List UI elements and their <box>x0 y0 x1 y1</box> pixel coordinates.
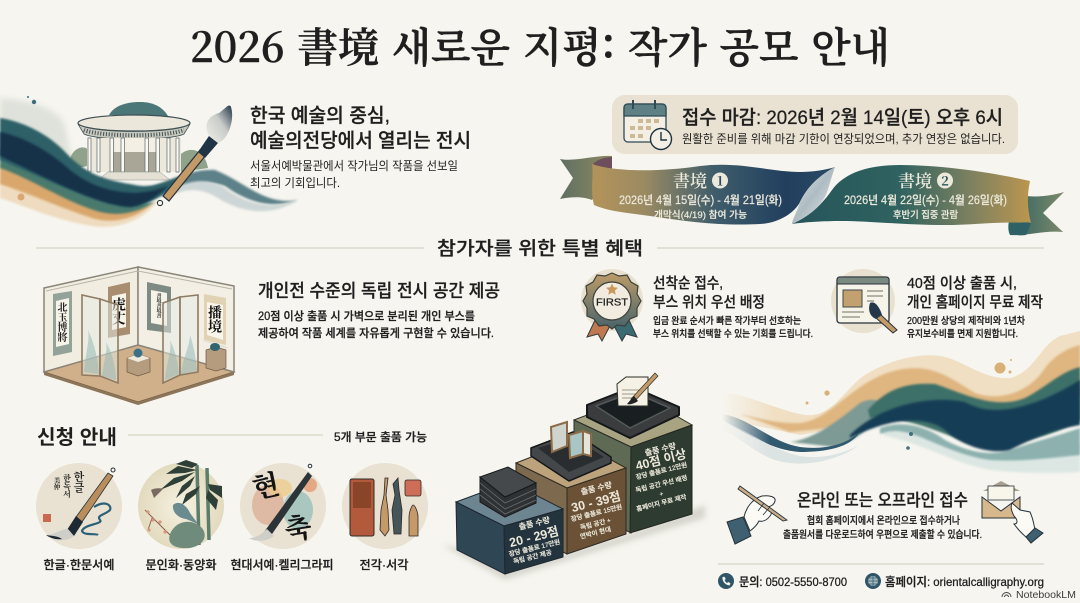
watermark icon <box>1002 592 1011 597</box>
deadline note: 원활한 준비를 위해 마감 기한이 연장되었으며, 추가 연장은 없습니다. <box>682 132 1005 146</box>
step label: 출품 수량 <box>518 514 551 532</box>
icon: hand with envelope <box>982 481 1043 543</box>
step label: 홈페이지 무료 제작 <box>635 492 687 513</box>
section note: 5개 부문 출품 가능 <box>334 430 427 444</box>
icon: modern calligraphy circle: 현 <box>248 463 283 507</box>
illustration: right ink wave <box>720 331 1080 473</box>
scroll 3: 書境書境書 <box>156 292 162 319</box>
wave: lower pale <box>880 430 1080 473</box>
folding screen right <box>163 295 198 383</box>
step label: 장당 출품료 17만원 <box>508 537 561 558</box>
icon: calligraphy circle <box>36 463 122 549</box>
icon: seal carving tools circle <box>342 463 428 549</box>
icon: first badge: FIRST <box>596 296 629 308</box>
section title: 신청 안내 <box>37 426 117 449</box>
benefit body line 1: 입금 완료 순서가 빠른 작가부터 선호하는 <box>653 314 801 327</box>
illustration: gallery booth <box>44 267 234 405</box>
step label: 장당 출품료 15만원 <box>570 502 623 523</box>
category: hangul and hanmun calligraphy <box>36 463 122 572</box>
step label: 독립 공간 + <box>579 515 612 532</box>
ceiling rail <box>46 271 232 291</box>
ink wave: pale tail <box>170 181 298 211</box>
ribbon number: 1 <box>717 170 723 190</box>
icon: first badge <box>581 269 643 341</box>
building: concert hall <box>70 102 208 180</box>
folding screen left <box>82 295 118 383</box>
icon: browser and brush <box>831 269 897 333</box>
illustration: concert hall with ink wave and brush <box>0 96 298 227</box>
panel: deadline <box>612 95 1018 154</box>
ribbon number: 2 <box>941 170 949 190</box>
wave: grey-green left <box>790 400 880 447</box>
step 3: 40 or more <box>574 373 692 533</box>
text block: private booth <box>258 281 500 340</box>
ink wave: teal tail <box>135 170 298 208</box>
ink wave: navy band <box>0 132 168 207</box>
benefit heading line 1: 선착순 접수, <box>653 275 723 292</box>
bushes <box>70 147 208 172</box>
category label: 전각·서각 <box>360 558 408 572</box>
watermark: NotebookLM <box>1002 589 1076 601</box>
pedestal and vase right <box>203 339 228 371</box>
booth heading: 개인전 수준의 독립 전시 공간 제공 <box>258 281 500 301</box>
ink spots dark <box>27 96 36 104</box>
wave: orange <box>740 345 1080 432</box>
paper and brush icon <box>617 373 658 406</box>
watermark text: NotebookLM <box>1016 589 1076 601</box>
step 1: 20 to 29 <box>456 467 563 574</box>
text block: art center intro <box>250 105 471 190</box>
deadline background <box>612 95 1018 154</box>
wave: low navy tail <box>722 414 860 452</box>
panel: how to apply <box>727 481 1043 544</box>
ribbon note: 개막식(4/19) 참여 가능 <box>654 209 747 221</box>
benefit heading line 2: 부스 위치 우선 배정 <box>653 294 765 311</box>
title: 2026 書境 새로운 지평: 작가 공모 안내 <box>190 15 890 74</box>
tray <box>531 432 611 481</box>
walls <box>44 267 138 372</box>
heading line 1: 한국 예술의 중심, <box>250 105 390 127</box>
phone text: 문의: 0502-5550-8700 <box>739 575 847 589</box>
benefit body line 2: 유지보수비를 면제 지원합니다. <box>907 327 1018 340</box>
step label: 독립 공간 제공 <box>512 547 553 566</box>
step label: 20 - 29점 <box>508 524 560 550</box>
ribbon label: 書境 <box>673 167 707 192</box>
ribbon label: 書境 <box>898 167 932 192</box>
ribbon tail fold <box>1010 222 1031 235</box>
wave: navy <box>850 380 1080 451</box>
footer: contact <box>718 564 1044 589</box>
ribbon number <box>937 170 953 190</box>
ink wave: pale wash <box>0 98 78 170</box>
ribbon: exhibition 2 <box>792 165 1064 235</box>
wave: beige <box>720 331 1080 435</box>
booth line 2: 제공하여 작품 세계를 자유롭게 구현할 수 있습니다. <box>258 326 494 340</box>
step label: 출품 수량 <box>580 479 613 497</box>
ribbon note: 후반기 집중 관람 <box>893 209 958 221</box>
wave: green <box>868 367 1080 445</box>
scroll 4: 播境 <box>205 304 225 333</box>
ribbon tail right <box>1008 192 1064 235</box>
step label: + <box>659 491 665 498</box>
icon: bamboo and bird circle <box>138 460 224 549</box>
scroll 2 <box>108 282 130 338</box>
tray <box>587 387 679 438</box>
heading text: 참가자를 위한 특별 혜택 <box>437 238 643 259</box>
ink wave: beige band <box>0 180 158 227</box>
pedestal and vase centre <box>127 348 150 376</box>
heading line 2: 예술의전당에서 열리는 전시 <box>250 130 471 152</box>
apply heading: 온라인 또는 오프라인 접수 <box>797 491 968 510</box>
footer divider <box>718 563 1044 565</box>
stacked paper <box>480 467 536 517</box>
icon: calligraphy circle: 美仲 <box>52 476 62 491</box>
category: seal carving <box>342 463 428 572</box>
ink spots <box>18 194 24 200</box>
heading divider <box>36 247 1044 249</box>
step label: 독립 공간 우선 배정 <box>634 473 688 494</box>
icon: modern calligraphy circle: 축 <box>282 505 314 549</box>
icon: calligraphy circle: 한독서 <box>62 473 72 499</box>
benefit body line 2: 부스 위치를 선택할 수 있는 기회를 드립니다. <box>653 327 813 340</box>
step label: 30 - 39점 <box>570 489 622 515</box>
category: literati and oriental painting <box>138 460 224 572</box>
step 2: 30 to 39 <box>516 422 626 554</box>
step label: 출품 수량 <box>644 440 677 458</box>
floor <box>44 345 234 402</box>
benefit body line 1: 200만원 상당의 제작비와 1년차 <box>907 314 1025 327</box>
apply line 1: 협회 홈페이지에서 온라인으로 접수하거나 <box>807 514 960 527</box>
benefit heading line 1: 40점 이상 출품 시, <box>907 275 1017 292</box>
body line 1: 서울서예박물관에서 작가님의 작품을 선보일 <box>250 159 458 173</box>
icon: hand with pen <box>727 486 787 544</box>
category: modern calligraphy <box>230 463 334 572</box>
chart: pricing steps <box>442 373 705 580</box>
ribbon body <box>592 164 835 225</box>
benefit: first come <box>581 269 813 341</box>
icon: calligraphy circle: 한글 <box>71 470 87 494</box>
scroll 4 <box>204 294 226 345</box>
category label: 현대서예·켈리그라피 <box>230 557 334 572</box>
icon: globe <box>865 573 881 589</box>
apply line 2: 출품원서를 다운로드하여 우편으로 제출할 수 있습니다. <box>783 528 982 541</box>
heading: application guide <box>37 426 427 449</box>
step label: 장당 출품료 12만원 <box>635 460 688 481</box>
frames <box>551 422 591 458</box>
step label <box>570 479 623 541</box>
booth line 1: 20점 이상 출품 시 가벽으로 분리된 개인 부스를 <box>258 309 475 323</box>
ink wave: orange band <box>0 164 152 221</box>
step label: 40점 이상 <box>634 447 688 473</box>
ribbon number <box>712 170 728 190</box>
body line 2: 최고의 기회입니다. <box>250 176 340 190</box>
wave: lower teal <box>880 424 1080 461</box>
deadline heading: 접수 마감: 2026년 2월 14일(토) 오후 6시 <box>682 107 1003 129</box>
ribbon body <box>792 165 1031 225</box>
icon: calligraphy brush <box>157 106 232 206</box>
website text: 홈페이지: orientalcalligraphy.org <box>885 575 1044 589</box>
ink wave: teal band <box>0 118 185 207</box>
step label <box>634 440 688 513</box>
icon: modern calligraphy circle <box>240 463 326 549</box>
category label: 문인화·동양화 <box>146 558 216 572</box>
benefit heading line 2: 개인 홈페이지 무료 제작 <box>907 294 1043 311</box>
scroll 2: 虎丈 <box>109 296 129 326</box>
ground shadow <box>442 505 705 580</box>
screen ink wash <box>84 330 197 380</box>
ink spots dark <box>906 432 913 450</box>
ribbon dates: 2026년 4월 15일(수) - 4월 21일(화) <box>619 193 782 207</box>
benefit: free homepage <box>831 269 1043 340</box>
step label: 연박이 현대 <box>579 524 612 541</box>
ink spots <box>806 359 1012 404</box>
category label: 한글·한문서예 <box>44 558 114 572</box>
icon: phone <box>718 573 734 589</box>
ink wave: green band <box>0 148 155 214</box>
ribbon tail left <box>560 156 612 200</box>
ribbon fold <box>792 167 835 224</box>
icon: calendar with clock <box>624 100 672 150</box>
step label <box>508 514 561 566</box>
scroll 1 <box>53 291 72 356</box>
scroll 3 <box>147 282 171 333</box>
ribbon dates: 2026년 4월 22일(수) - 4월 26일(화) <box>844 193 1007 207</box>
wave: pale tail <box>720 420 858 464</box>
section rule <box>128 434 323 436</box>
scroll 1: 北玉博將 <box>55 302 70 343</box>
ribbon: exhibition 1 <box>560 156 835 225</box>
